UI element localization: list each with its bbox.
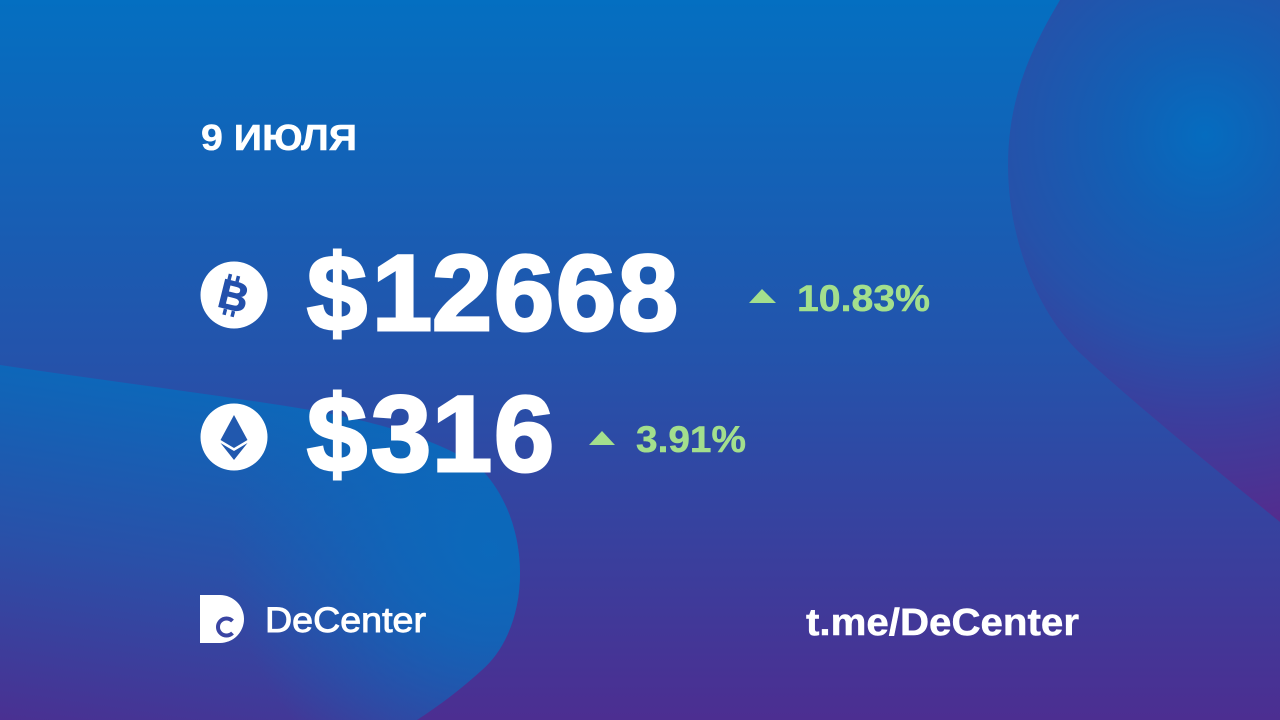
ethereum price: $316	[307, 373, 554, 494]
ethereum change arrow	[589, 431, 615, 445]
DeCenter logo: DeCenter	[265, 601, 426, 640]
icon: bitcoin: B	[214, 270, 254, 322]
blob: top right	[1008, 0, 1280, 522]
DeCenter logo	[200, 595, 426, 643]
date heading: 9 ИЮЛЯ	[201, 117, 357, 158]
blob: bottom left	[0, 365, 520, 720]
icon: ethereum	[200, 404, 268, 470]
bitcoin change arrow	[749, 289, 776, 303]
ethereum change value: 3.91%	[636, 419, 746, 460]
bitcoin price: $12668	[307, 232, 678, 353]
channel link: t.me/DeCenter	[806, 602, 1079, 644]
bitcoin change value: 10.83%	[797, 278, 930, 319]
icon: bitcoin	[200, 262, 268, 328]
